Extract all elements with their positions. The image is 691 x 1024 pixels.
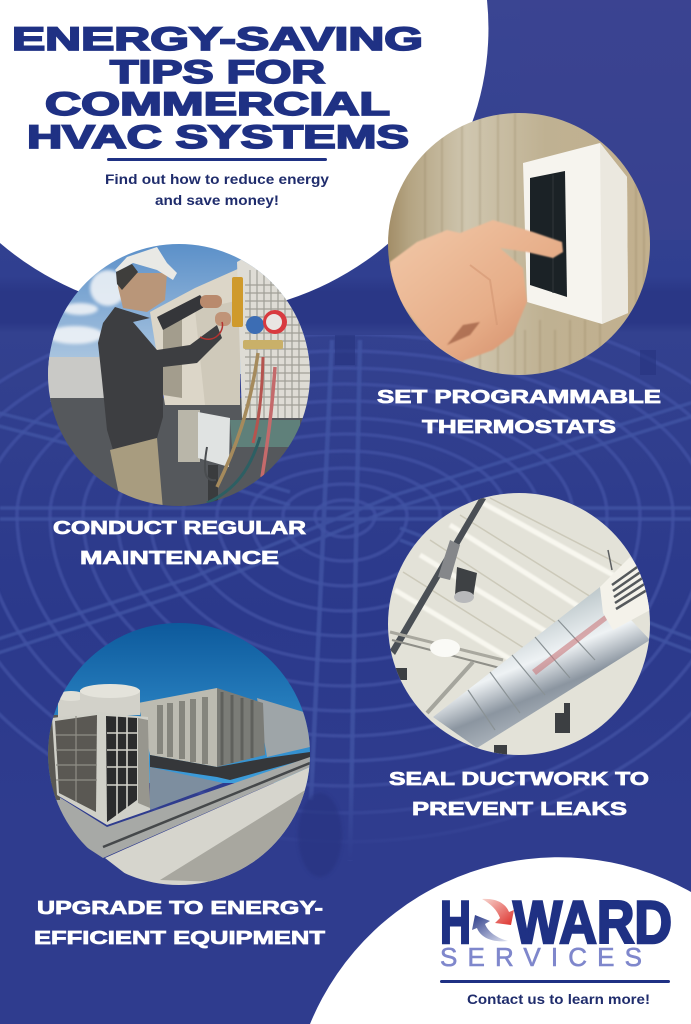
subtitle: and save money! [155,192,279,208]
subtitle [105,171,329,208]
title: HVAC SYSTEMS [27,119,409,155]
label: conduct regular maintenance [53,518,306,568]
label: seal ductwork: PREVENT LEAKS [412,799,627,819]
white bottom-right blob [310,857,691,1024]
label: seal ductwork [389,769,649,819]
label: conduct regular maintenance: CONDUCT REGULAR [53,518,306,538]
label: set programmable thermostats [377,387,661,437]
title [12,21,423,155]
logo rule [440,980,670,983]
logo: Howard Services: H [440,889,471,956]
label: upgrade equipment [34,898,325,948]
label: upgrade equipment: EFFICIENT EQUIPMENT [34,928,325,948]
subtitle: Find out how to reduce energy [105,171,329,187]
photo: thermostat [388,113,650,375]
logo: Howard Services: WARD [513,889,672,956]
label: set programmable thermostats: SET PROGRAMMABLE [377,387,661,407]
label: seal ductwork: SEAL DUCTWORK TO [389,769,649,789]
label: set programmable thermostats: THERMOSTATS [422,417,616,437]
photo: technician [47,244,310,510]
title: COMMERCIAL [45,86,390,122]
label: conduct regular maintenance: MAINTENANCE [80,548,279,568]
title rule [107,158,327,161]
contact line: Contact us to learn more! [467,991,650,1007]
label: upgrade equipment: UPGRADE TO ENERGY- [37,898,323,918]
photo: ductwork [388,493,650,759]
title: TIPS FOR [110,54,325,90]
logo: Howard Services [440,889,672,972]
photo: rooftop units [46,623,310,885]
title: ENERGY-SAVING [12,21,423,57]
icon: red and blue arrows [472,899,514,941]
white top blob [0,0,488,315]
logo: Howard Services: SERVICES [440,942,642,972]
